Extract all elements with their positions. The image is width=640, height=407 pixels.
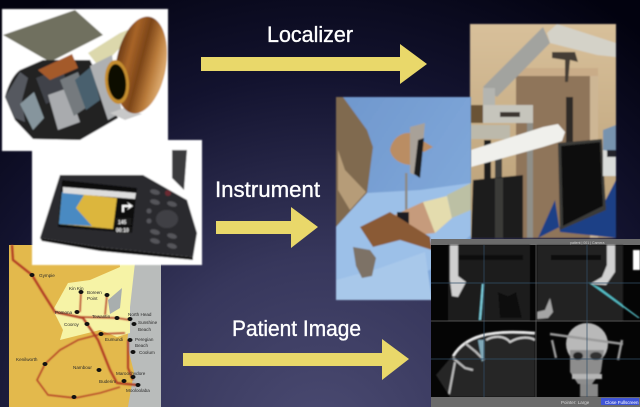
map: Sunshine Coast region: Beach xyxy=(135,343,148,348)
map: Sunshine Coast region: North Head xyxy=(128,312,152,317)
photo: GPS device: 145 xyxy=(118,220,127,226)
map: Sunshine Coast region: Nambour xyxy=(73,365,92,370)
viewer footer: Pointer: Large xyxy=(561,400,590,405)
map: Sunshine Coast region: Buderim xyxy=(99,379,116,384)
map: Sunshine Coast region: Gympie xyxy=(39,273,55,278)
crosshair lines xyxy=(431,245,640,397)
heading: Instrument: Instrument xyxy=(215,177,320,202)
arrow: Instrument xyxy=(216,207,318,248)
map: Sunshine Coast region: Kin Kin xyxy=(69,286,84,291)
heading: Localizer: Localizer xyxy=(267,22,353,47)
map: Sunshine Coast region: Coolum xyxy=(139,350,155,355)
map: Sunshine Coast region: Tewantin xyxy=(92,314,111,319)
map: Sunshine Coast region: Eumundi xyxy=(105,337,123,342)
map: Sunshine Coast region: Peregian xyxy=(135,337,154,342)
arrow: Localizer xyxy=(201,44,427,84)
viewer footer: Close Fullscreen xyxy=(605,400,639,405)
map: Sunshine Coast region: Cooroy xyxy=(64,322,80,327)
map: Sunshine Coast region: Maroochydore xyxy=(116,371,146,376)
map: Sunshine Coast region xyxy=(9,245,161,407)
photo: surgeon holding instrument over draped patient xyxy=(336,97,471,300)
map: Sunshine Coast region: Sunshine xyxy=(138,320,158,325)
map: Sunshine Coast region: Boreen xyxy=(87,290,102,295)
photo: satellite instrument xyxy=(2,9,174,151)
map: Sunshine Coast region: Point xyxy=(87,296,98,301)
map: Sunshine Coast region: Beach xyxy=(138,327,151,332)
heading: Patient Image: Patient Image xyxy=(232,316,361,341)
map: Sunshine Coast region: Pomona xyxy=(55,310,73,315)
photo: localizer camera on arm in operating room xyxy=(470,24,616,238)
viewer footer xyxy=(431,397,640,407)
3D skull render xyxy=(550,323,623,397)
arrow: Patient Image xyxy=(183,339,409,380)
photo: GPS device: 00:10 xyxy=(116,228,129,234)
screenshot: CT navigation viewer: patient | 001 | Camera xyxy=(570,241,605,245)
map: Sunshine Coast region: Kenilworth xyxy=(16,357,38,362)
photo: GPS device xyxy=(32,140,202,265)
screenshot: CT navigation viewer xyxy=(431,239,640,407)
map: Sunshine Coast region: Mooloolaba xyxy=(126,388,150,393)
